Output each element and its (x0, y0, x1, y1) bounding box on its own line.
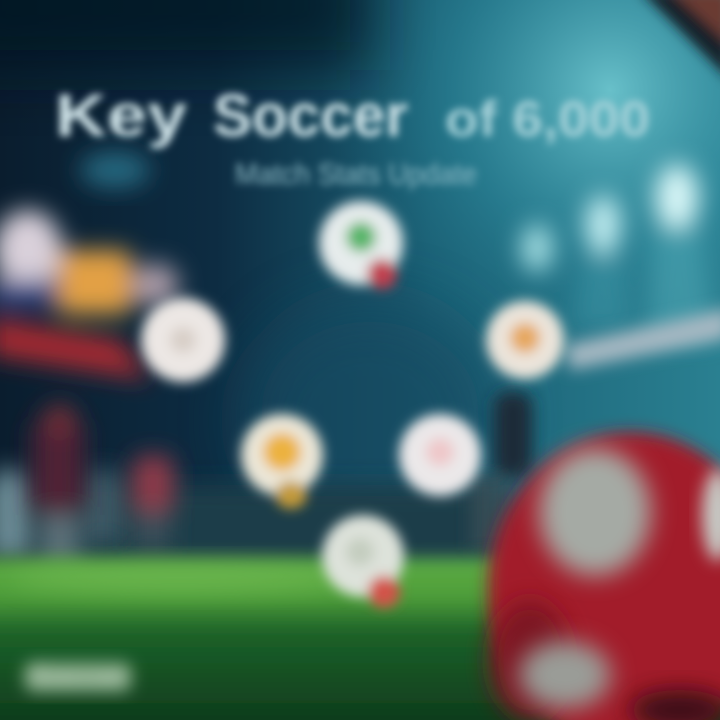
title: Soccer (213, 82, 408, 149)
bottom-left label: Soccer (28, 661, 128, 691)
icon: circle left (141, 298, 225, 382)
flags at left (0, 210, 179, 380)
player left (32, 404, 84, 570)
icon: circle bottom (322, 515, 404, 608)
player centre right (470, 392, 532, 550)
title: Key (55, 82, 188, 149)
icon: circle lower right (399, 414, 481, 496)
corner post (640, 0, 720, 80)
player second (132, 455, 174, 550)
title: of 6,000 (445, 91, 650, 147)
teal glow under title (80, 152, 150, 188)
pitch (0, 558, 720, 720)
icon: circle right (486, 301, 564, 379)
streak of light at right (565, 308, 720, 370)
subtitle: Match Stats Update (235, 158, 477, 191)
floodlights (521, 164, 715, 340)
icon: circle top centre (319, 201, 403, 289)
title (55, 82, 650, 149)
red soccer ball (488, 432, 720, 720)
crowd band (0, 470, 500, 570)
icon: circle lower left (241, 414, 323, 509)
